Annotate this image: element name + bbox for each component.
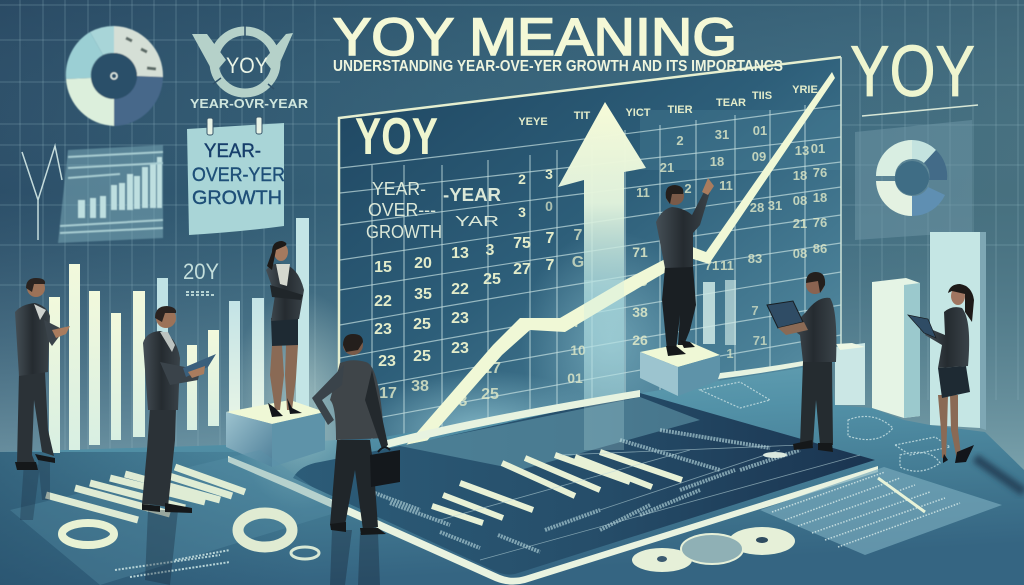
woman's box bbox=[226, 400, 325, 467]
calendar numbers: 7 bbox=[573, 314, 581, 330]
calendar numbers: 3 bbox=[486, 242, 495, 259]
calendar numbers: G bbox=[572, 254, 584, 271]
panel frame lines bbox=[440, 445, 860, 560]
presenter's box bbox=[640, 342, 720, 396]
right wall YOY: YOY bbox=[850, 32, 975, 112]
calendar numbers: 18 bbox=[813, 190, 827, 205]
calendar numbers: 1 bbox=[726, 346, 734, 361]
calendar numbers: 0 bbox=[545, 198, 553, 214]
panel glow strip bbox=[400, 397, 700, 470]
right wall pie panel bbox=[855, 120, 972, 240]
small line icon bbox=[22, 146, 62, 240]
figure: presenter pointing at board bbox=[656, 178, 714, 356]
board label: year-over-year growth: YEAR- bbox=[372, 179, 426, 199]
pinned note: year-over-year growth: YEAR- bbox=[204, 141, 261, 162]
floor bbox=[0, 362, 1024, 585]
calendar numbers: 3 bbox=[459, 393, 468, 410]
pinned note: year-over-year growth bbox=[187, 117, 285, 235]
board column labels: TIIS bbox=[752, 90, 772, 102]
calendar numbers: 01 bbox=[567, 370, 583, 386]
calendar numbers: 26 bbox=[632, 332, 648, 348]
figure: woman on box bbox=[266, 241, 304, 417]
calendar numbers: 27 bbox=[513, 261, 531, 278]
wall bar chart panel bbox=[58, 145, 163, 243]
floor chart panel left bbox=[10, 450, 345, 585]
calendar numbers: 25 bbox=[481, 386, 499, 403]
calendar numbers: 11 bbox=[720, 258, 734, 273]
board label: year-over-year growth: GROWTH bbox=[366, 222, 442, 242]
pinned note: year-over-year growth: OVER-YER bbox=[192, 165, 285, 186]
calendar numbers: 23 bbox=[374, 321, 392, 338]
calendar numbers: 11 bbox=[719, 178, 733, 193]
calendar numbers: 38 bbox=[632, 304, 648, 320]
figure: man with laptop bbox=[767, 272, 836, 452]
calendar numbers: 15 bbox=[374, 259, 392, 276]
calendar numbers: 20 bbox=[414, 255, 432, 272]
board column labels: TIT bbox=[574, 110, 591, 122]
calendar numbers: 31 bbox=[715, 127, 729, 142]
panel text texture bbox=[372, 430, 800, 552]
board label: year-over-year growth: OVER--- bbox=[368, 200, 436, 220]
calendar numbers: 83 bbox=[748, 251, 762, 266]
YEAR-OVER-YEAR label: YEAR-OVR-YEAR bbox=[190, 96, 309, 111]
calendar numbers: 21 bbox=[793, 216, 807, 231]
floor vignette bbox=[0, 452, 1024, 585]
figure: man with briefcase bbox=[312, 334, 400, 585]
calendar numbers: 13 bbox=[451, 245, 469, 262]
main title: YOY MEANING bbox=[333, 8, 737, 67]
calendar numbers: 08 bbox=[793, 246, 807, 261]
calendar numbers: 3 bbox=[518, 204, 526, 220]
floor line art bbox=[700, 382, 950, 471]
right 3D bars bbox=[835, 232, 986, 430]
calendar numbers: 7 bbox=[574, 227, 583, 244]
growth trend line bbox=[400, 72, 835, 458]
YOY emblem bbox=[192, 25, 293, 93]
board label: year-over-year growth: YAR bbox=[455, 213, 499, 230]
figure: woman with tablet bbox=[908, 284, 974, 463]
figure: man with phone bbox=[15, 278, 70, 520]
calendar numbers: 35 bbox=[414, 286, 432, 303]
20Y wall label bbox=[183, 259, 219, 295]
subtitle: UNDERSTANDING YEAR-OVE-YER GROWTH AND ITS IMPORTANCS bbox=[333, 58, 783, 75]
figure: man with tablet bbox=[142, 306, 216, 585]
calendar numbers: 17 bbox=[483, 360, 501, 377]
calendar numbers: 18 bbox=[710, 154, 724, 169]
board column labels: YEYE bbox=[518, 116, 548, 128]
board column labels: TIER bbox=[667, 104, 693, 116]
main calendar board bbox=[338, 56, 842, 440]
calendar numbers: 28 bbox=[750, 200, 764, 215]
left wall glow bbox=[230, 290, 370, 510]
calendar numbers: 2 bbox=[676, 133, 684, 148]
tablet floor panel bbox=[228, 393, 878, 585]
calendar numbers: 3 bbox=[545, 166, 553, 182]
calendar numbers: 7 bbox=[546, 257, 555, 274]
board YOY heading: YOY bbox=[355, 108, 438, 166]
calendar numbers: 76 bbox=[813, 165, 827, 180]
calendar numbers: 31 bbox=[768, 198, 782, 213]
woman's floor shadow bbox=[975, 458, 1024, 492]
calendar numbers: 25 bbox=[483, 271, 501, 288]
calendar numbers: 23 bbox=[451, 310, 469, 327]
pie chart bbox=[66, 26, 163, 126]
board column labels bbox=[518, 86, 818, 125]
calendar numbers: 75 bbox=[513, 235, 531, 252]
20Y wall label: 20Y bbox=[183, 259, 219, 284]
calendar numbers: 25 bbox=[413, 316, 431, 333]
calendar numbers: 39 bbox=[632, 273, 648, 289]
calendar numbers: 25 bbox=[413, 348, 431, 365]
calendar numbers: 23 bbox=[378, 353, 396, 370]
calendar numbers: 21 bbox=[660, 160, 674, 175]
board column labels: TEAR bbox=[716, 97, 746, 109]
floor discs bbox=[632, 527, 795, 572]
calendar numbers: 2 bbox=[518, 171, 526, 187]
board column labels: YRIE bbox=[792, 84, 818, 96]
calendar numbers: 71 bbox=[753, 333, 767, 348]
calendar numbers: 71 bbox=[632, 244, 648, 260]
board column labels: YICT bbox=[625, 107, 651, 119]
calendar numbers: 22 bbox=[451, 281, 469, 298]
big growth arrow bbox=[558, 102, 646, 440]
calendar numbers: 38 bbox=[411, 378, 429, 395]
calendar numbers: 01 bbox=[811, 141, 825, 156]
panel bars bbox=[432, 452, 682, 523]
calendar numbers: 13 bbox=[795, 143, 809, 158]
calendar numbers: 23 bbox=[451, 340, 469, 357]
calendar numbers: 7 bbox=[546, 230, 555, 247]
calendar numbers: 86 bbox=[813, 241, 827, 256]
calendar numbers: 17 bbox=[379, 385, 397, 402]
calendar numbers: 71 bbox=[705, 258, 719, 273]
calendar numbers: 08 bbox=[793, 193, 807, 208]
calendar numbers: 09 bbox=[752, 149, 766, 164]
floor chart panel right bbox=[760, 467, 1002, 555]
white base band bbox=[387, 356, 832, 448]
calendar numbers: 2 bbox=[684, 181, 692, 196]
calendar numbers: 18 bbox=[793, 168, 807, 183]
glowing light column bbox=[584, 280, 624, 450]
calendar numbers: 01 bbox=[753, 123, 767, 138]
left wall bars bbox=[49, 218, 309, 453]
board label: year-over-year growth: -YEAR bbox=[443, 185, 501, 205]
calendar numbers: 76 bbox=[813, 215, 827, 230]
calendar numbers: 22 bbox=[374, 293, 392, 310]
calendar numbers: 10 bbox=[570, 342, 586, 358]
calendar numbers: 7 bbox=[751, 303, 759, 318]
YOY emblem: YOY bbox=[226, 53, 268, 78]
calendar numbers: 11 bbox=[636, 185, 650, 200]
calendar numbers bbox=[374, 123, 827, 410]
board label: year-over-year growth bbox=[366, 179, 501, 242]
pinned note: year-over-year growth: GROWTH bbox=[192, 188, 282, 209]
board bars behind presenter bbox=[703, 280, 736, 345]
